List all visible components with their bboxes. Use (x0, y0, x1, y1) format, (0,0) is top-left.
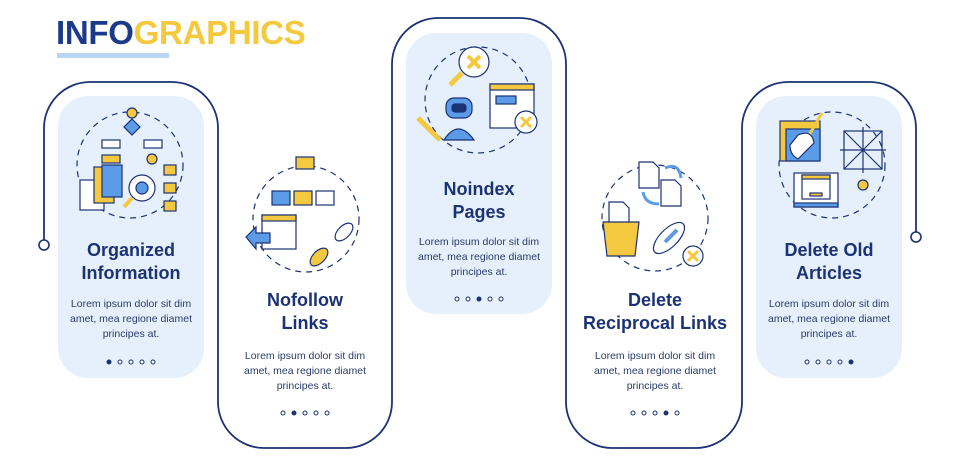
icon: nofollow links (245, 156, 360, 273)
icon: organized information (76, 107, 184, 219)
icon: delete old articles (778, 111, 886, 219)
heading: nofollow links: Links (281, 313, 328, 333)
icon: noindex pages (416, 46, 538, 154)
icon: delete reciprocal links (601, 161, 709, 272)
heading: organized information: Organized (87, 240, 175, 260)
dots 5 (804, 360, 854, 364)
heading: delete reciprocal links (583, 290, 727, 333)
heading: organized information: Information (82, 263, 180, 283)
dots 2 (280, 410, 330, 416)
heading: delete old articles: Articles (796, 263, 862, 283)
text: nofollow links: Lorem ipsum dolor sit dim amet, mea regione diamet principes at. (244, 350, 366, 392)
heading: noindex pages: Pages (452, 202, 506, 222)
heading: noindex pages: Noindex (443, 179, 514, 199)
dots 1 (106, 360, 156, 364)
title: INFOGRAPHICS (56, 14, 305, 51)
heading: nofollow links: Nofollow (267, 290, 343, 310)
text: noindex pages: Lorem ipsum dolor sit dim amet, mea regione diamet principes at. (418, 236, 540, 278)
heading: organized information (82, 240, 180, 283)
heading: delete reciprocal links: Delete (628, 290, 682, 310)
title underline (57, 53, 169, 58)
heading: delete old articles: Delete Old (784, 240, 874, 260)
dots 4 (630, 410, 680, 416)
text: delete reciprocal links: Lorem ipsum dolor sit dim amet, mea regione diamet principes at. (594, 350, 716, 392)
text: delete old articles: Lorem ipsum dolor sit dim amet, mea regione diamet principes at. (768, 298, 890, 340)
heading: noindex pages (443, 179, 514, 222)
heading: nofollow links (267, 290, 343, 333)
heading: delete old articles (784, 240, 874, 283)
text: organized information: Lorem ipsum dolor sit dim amet, mea regione diamet principes at. (70, 298, 192, 340)
dots 3 (454, 296, 504, 302)
heading: delete reciprocal links: Reciprocal Links (583, 313, 727, 333)
